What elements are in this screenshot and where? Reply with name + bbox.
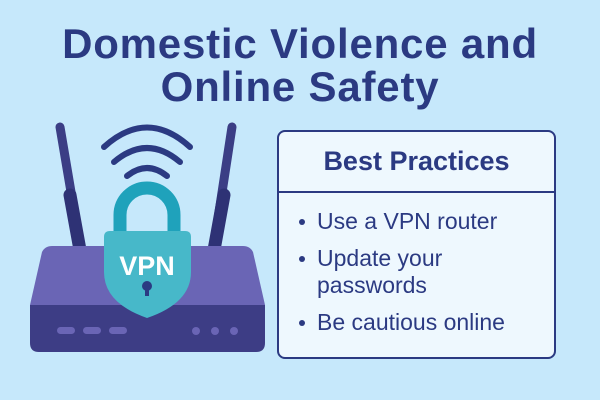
title: Domestic Violence and <box>62 20 538 67</box>
wifi arcs <box>104 128 190 176</box>
bullet list: passwords <box>317 272 427 298</box>
router body <box>30 246 265 305</box>
title <box>62 20 538 110</box>
title: Online Safety <box>161 63 439 110</box>
bullet list: Update your <box>317 245 442 271</box>
bullet list: Use a VPN router <box>317 208 497 234</box>
panel heading: Best Practices <box>323 146 510 176</box>
icon: VPN router: VPN <box>119 251 175 281</box>
antennas <box>60 127 232 250</box>
panel: best practices <box>277 130 556 359</box>
lock <box>120 188 174 232</box>
panel heading <box>279 132 554 193</box>
lights <box>57 327 238 335</box>
bullet list: Be cautious online <box>317 309 505 335</box>
bullet list <box>299 208 505 335</box>
